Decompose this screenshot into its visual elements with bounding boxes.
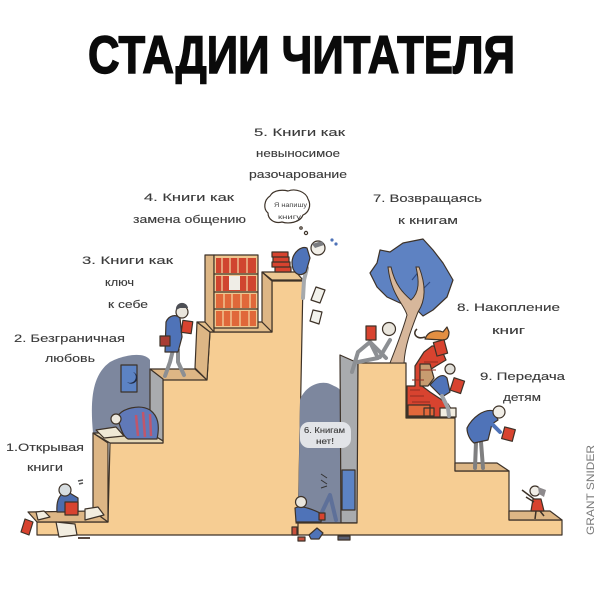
label 8 <box>457 302 560 337</box>
bookshelf <box>205 255 258 332</box>
label 9: детям <box>503 392 541 404</box>
label 5: разочарование <box>249 169 347 181</box>
label 9: 9. Передача <box>480 371 566 383</box>
label 4: 4. Книги как <box>144 192 234 204</box>
figure: reader among books <box>430 376 450 397</box>
icon: falling pages <box>310 287 325 324</box>
label 9 <box>480 371 566 404</box>
panel: ascending stairs <box>28 272 303 535</box>
icon: blue door <box>342 470 355 510</box>
tree <box>370 239 453 363</box>
panel: descending stairs <box>298 363 562 535</box>
figure: parent passing a book <box>467 406 515 468</box>
label 4 <box>133 192 246 226</box>
figure: teen walking with a book <box>160 303 193 376</box>
figure: reader slumped in pit <box>295 474 336 522</box>
stage labels <box>6 127 566 474</box>
figure: child reaching for a book <box>522 486 546 519</box>
label 3: 3. Книги как <box>82 255 173 267</box>
label 1: книги <box>27 462 63 474</box>
speech bubble: 6. Книгам <box>304 426 345 435</box>
label 5: 5. Книги как <box>254 127 345 139</box>
panel: pit with grey wall <box>295 355 358 523</box>
figure: child reading under blanket <box>96 407 158 439</box>
label 3: к себе <box>108 299 148 311</box>
label 1 <box>6 442 84 474</box>
label 8: 8. Накопление <box>457 302 560 314</box>
speech bubble: нет! <box>316 437 334 446</box>
items scattered under pit <box>292 527 350 541</box>
figure: reader under the tree <box>352 322 396 372</box>
label 2 <box>14 333 125 365</box>
stack of books with reader and cat <box>407 327 465 417</box>
icon: window with moon <box>121 365 137 392</box>
thought bubble: Я напишу <box>274 202 308 209</box>
label 3 <box>82 255 173 311</box>
label 1: 1.Открывая <box>6 442 84 454</box>
label 2: 2. Безграничная <box>14 333 125 345</box>
figure: reader on the floor <box>21 480 104 538</box>
thought bubble: книгу <box>278 214 302 221</box>
staircase illustration <box>21 190 562 541</box>
figure: writer on top step with stack of books <box>272 238 338 324</box>
label 8: книг <box>492 325 525 337</box>
label 3: ключ <box>105 277 134 289</box>
speech bubble <box>300 422 351 448</box>
label 7: к книгам <box>398 215 458 227</box>
label 7: 7. Возвращаясь <box>373 193 482 205</box>
label 5 <box>249 127 347 181</box>
title: СТАДИИ ЧИТАТЕЛЯ <box>88 26 515 85</box>
label 4: замена общению <box>133 214 246 226</box>
thought bubble <box>265 190 310 235</box>
label 5: невыносимое <box>256 148 340 160</box>
label 2: любовь <box>45 353 95 365</box>
icon: cat <box>425 327 449 340</box>
artist credit: GRANT SNIDER <box>585 445 597 535</box>
panel: bedroom at night <box>92 355 163 443</box>
label 7 <box>373 193 482 227</box>
